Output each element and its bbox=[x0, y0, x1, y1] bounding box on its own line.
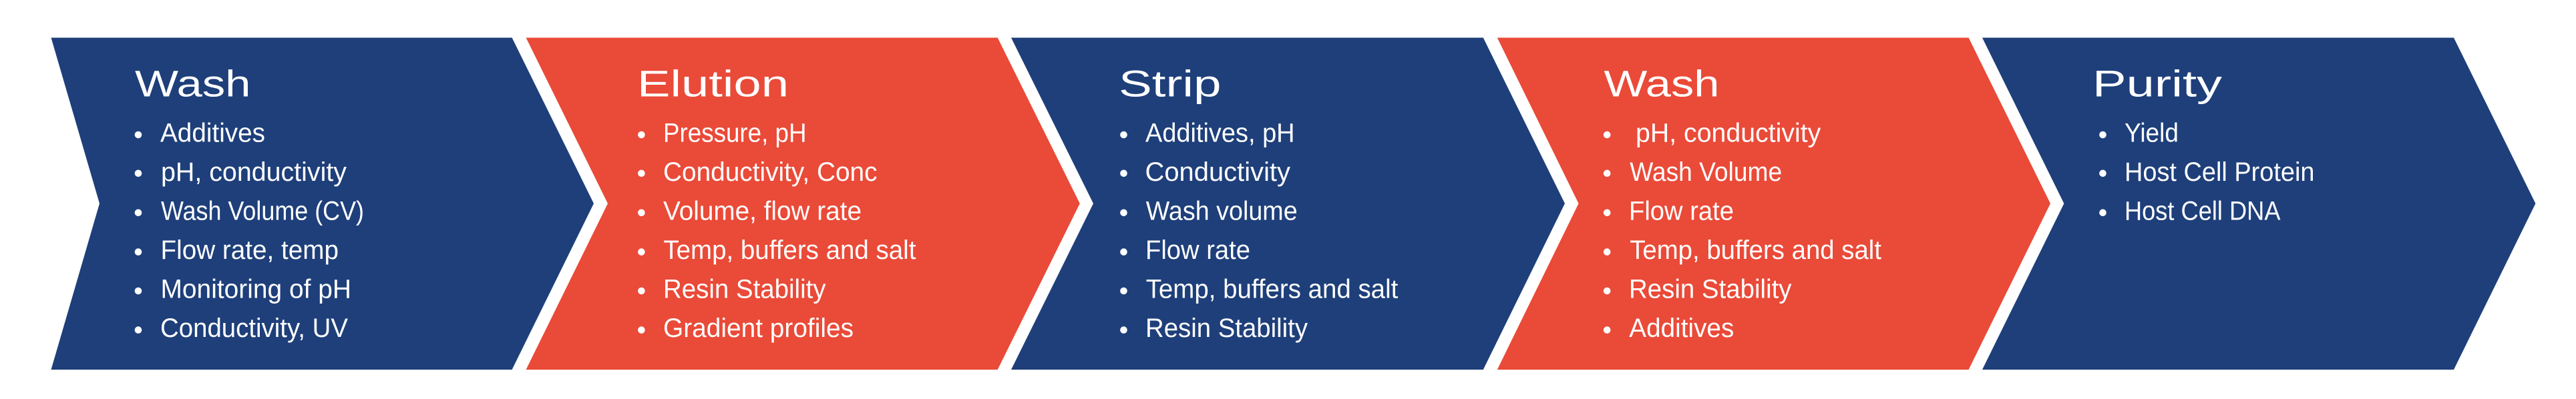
list: wash parameters bbox=[135, 119, 364, 343]
list: wash parameters: Monitoring of pH bbox=[160, 275, 351, 304]
panel: wash bbox=[51, 37, 594, 370]
heading: purity: Purity bbox=[2092, 62, 2222, 104]
panel: elution bbox=[526, 37, 1080, 370]
chevron shape: wash bbox=[51, 37, 594, 370]
heading: strip: Strip bbox=[1119, 62, 1221, 104]
chevron shape: elution bbox=[526, 37, 1080, 370]
list: wash parameters: Additives bbox=[160, 119, 265, 148]
list: elution parameters: Volume, flow rate bbox=[663, 197, 862, 226]
list: strip parameters: Temp, buffers and salt bbox=[1146, 275, 1398, 304]
list: strip parameters: Resin Stability bbox=[1145, 314, 1308, 343]
list: second wash parameters: Wash Volume bbox=[1630, 157, 1782, 187]
list: elution parameters: Temp, buffers and salt bbox=[663, 236, 916, 265]
list: second wash parameters: pH, conductivity bbox=[1636, 119, 1821, 148]
list: purity parameters bbox=[2099, 119, 2315, 226]
list: elution parameters: Resin Stability bbox=[663, 275, 825, 304]
list: strip parameters bbox=[1120, 119, 1398, 343]
heading: elution: Elution bbox=[637, 63, 789, 104]
panel: strip bbox=[1011, 37, 1565, 370]
list: strip parameters: Wash volume bbox=[1146, 197, 1298, 226]
list: purity parameters: Host Cell DNA bbox=[2125, 197, 2281, 226]
panel: second wash bbox=[1497, 37, 2050, 370]
list: elution parameters: Conductivity, Conc bbox=[663, 157, 878, 187]
list: wash parameters: Flow rate, temp bbox=[160, 236, 339, 265]
heading: wash: Wash bbox=[135, 62, 251, 104]
list: wash parameters: Wash Volume (CV) bbox=[161, 197, 364, 226]
list: strip parameters: Flow rate bbox=[1145, 236, 1250, 265]
chevron shape: second wash bbox=[1497, 37, 2050, 370]
list: second wash parameters: Additives bbox=[1629, 314, 1734, 343]
heading: second wash: Wash bbox=[1604, 62, 1719, 104]
list: strip parameters: Additives, pH bbox=[1145, 119, 1295, 148]
panel: purity bbox=[1982, 37, 2535, 370]
list: purity parameters: Yield bbox=[2125, 119, 2179, 148]
chevron shape: purity bbox=[1982, 37, 2535, 370]
list: wash parameters: Conductivity, UV bbox=[160, 314, 348, 343]
list: second wash parameters: Temp, buffers and salt bbox=[1630, 236, 1881, 265]
list: wash parameters: pH, conductivity bbox=[161, 157, 347, 187]
list: elution parameters bbox=[638, 119, 916, 343]
list: elution parameters: Gradient profiles bbox=[663, 314, 854, 343]
chevron shape: strip bbox=[1011, 37, 1565, 370]
list: elution parameters: Pressure, pH bbox=[663, 119, 807, 148]
list: second wash parameters: Resin Stability bbox=[1629, 275, 1791, 304]
list: purity parameters: Host Cell Protein bbox=[2125, 157, 2315, 187]
list: strip parameters: Conductivity bbox=[1145, 157, 1290, 187]
list: second wash parameters: Flow rate bbox=[1629, 197, 1734, 226]
list: second wash parameters bbox=[1604, 119, 1881, 343]
